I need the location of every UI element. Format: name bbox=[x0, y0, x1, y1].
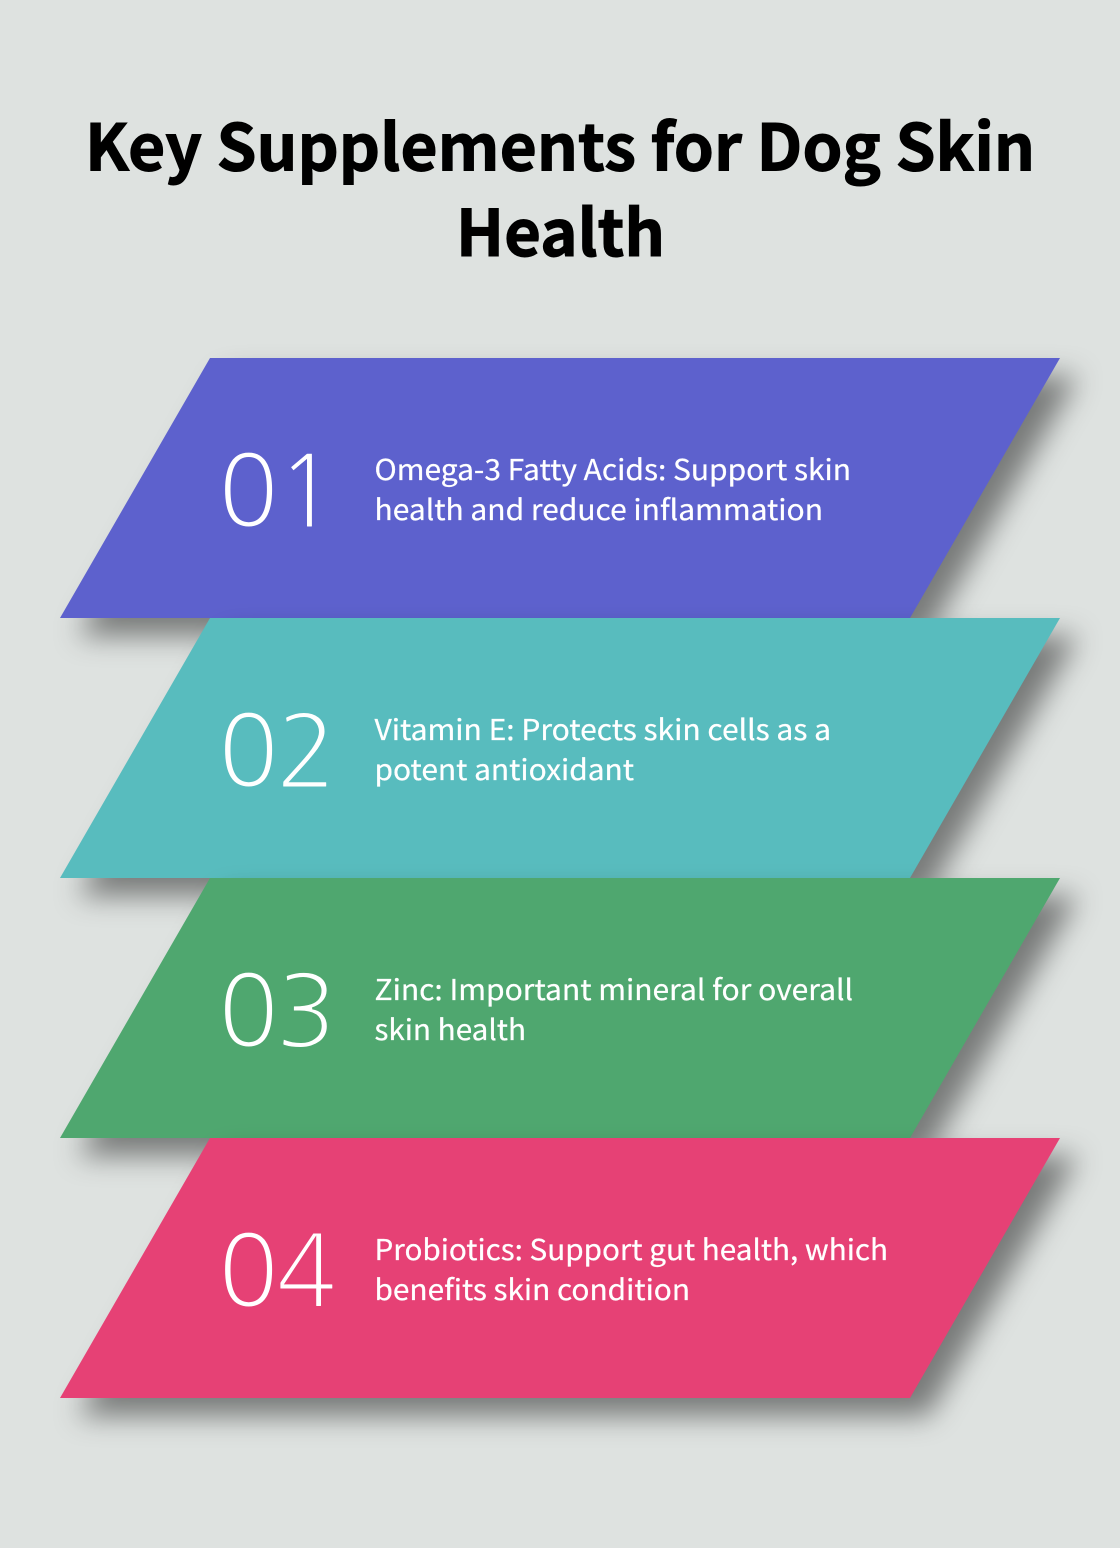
panel: 01 omega-3 bbox=[60, 358, 1078, 636]
number 01: 01 bbox=[218, 442, 337, 542]
text: vitamin E: potent antioxidant bbox=[374, 748, 634, 789]
number 04: 04 bbox=[218, 1222, 337, 1322]
title: Health bbox=[456, 183, 665, 275]
title: Key Supplements for Dog Skin bbox=[85, 98, 1035, 190]
text: vitamin E bbox=[374, 708, 831, 789]
panel: 02 vitamin E bbox=[60, 618, 1078, 896]
text: vitamin E: Vitamin E: Protects skin cells as a bbox=[374, 708, 831, 749]
text: probiotics: benefits skin condition bbox=[374, 1268, 690, 1309]
text: zinc: Zinc: Important mineral for overall bbox=[374, 968, 853, 1009]
text: omega-3: Omega-3 Fatty Acids: Support skin bbox=[374, 448, 851, 489]
number 03: 03 bbox=[218, 962, 337, 1062]
text: probiotics bbox=[374, 1228, 888, 1309]
text: probiotics: Probiotics: Support gut health, which bbox=[374, 1228, 888, 1269]
text: omega-3 bbox=[374, 448, 851, 529]
text: zinc: skin health bbox=[374, 1008, 526, 1049]
text: omega-3: health and reduce inflammation bbox=[374, 488, 823, 529]
number 02: 02 bbox=[218, 702, 337, 802]
text: zinc bbox=[374, 968, 853, 1049]
panel: 04 probiotics bbox=[60, 1138, 1078, 1416]
panel: 03 zinc bbox=[60, 878, 1078, 1156]
title bbox=[85, 98, 1035, 275]
